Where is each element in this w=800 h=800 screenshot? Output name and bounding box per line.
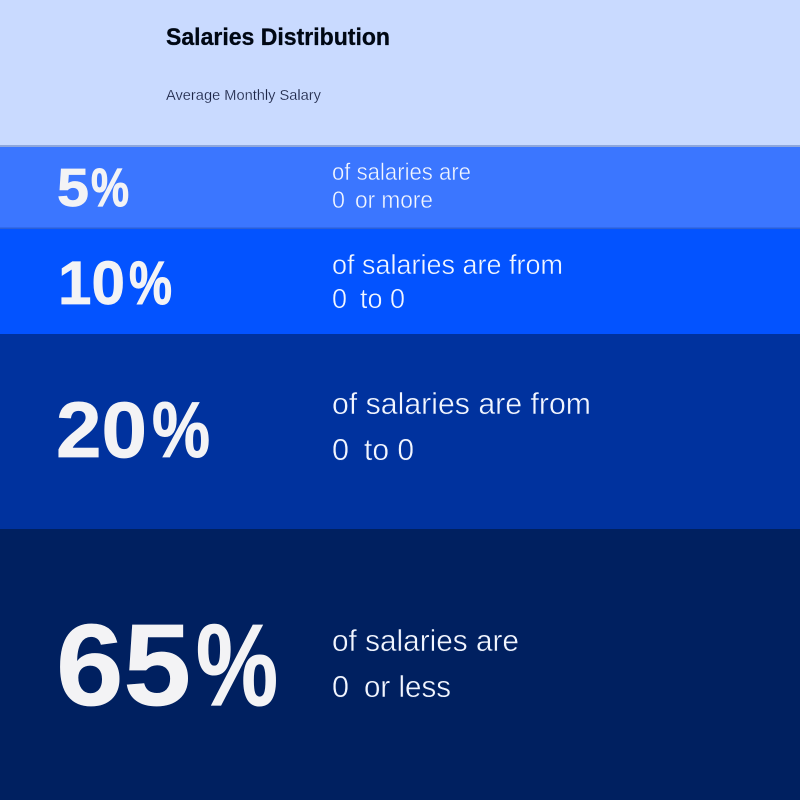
panel: 10% band <box>0 228 800 334</box>
panel: 5% band <box>0 145 800 228</box>
description: 20%: to 0 <box>364 432 414 467</box>
description: 20%: of salaries are from <box>332 386 591 421</box>
description: 20%: 0 <box>332 432 349 467</box>
description: 10%: of salaries are from <box>332 249 563 280</box>
description: 5%: of salaries are <box>332 159 471 186</box>
percentage: 65%: 65 <box>56 600 191 730</box>
panel: 20% band <box>0 334 800 529</box>
description: 5%: or more <box>355 187 433 214</box>
description: 65%: 0 <box>332 669 349 704</box>
description: 5%: 0 <box>332 187 345 214</box>
percentage: 65%: % <box>196 600 278 730</box>
description: 65%: or less <box>364 669 451 704</box>
description: 10% <box>332 249 563 314</box>
percentage: 65% <box>56 600 278 730</box>
percentage: 5%: % <box>91 158 129 218</box>
panel: header <box>0 0 800 146</box>
description: 65%: of salaries are <box>332 623 519 658</box>
percentage: 10% <box>58 249 172 317</box>
title: Salaries Distribution <box>166 24 390 51</box>
percentage: 5%: 5 <box>57 158 89 218</box>
description: 65% <box>332 623 519 704</box>
description: 10%: 0 <box>332 283 347 314</box>
subtitle: Average Monthly Salary <box>166 87 321 104</box>
percentage: 20%: 20 <box>56 385 147 474</box>
percentage: 10%: % <box>129 249 172 317</box>
percentage: 10%: 10 <box>58 249 125 317</box>
description: 20% <box>332 386 591 467</box>
panel: 65% band <box>0 529 800 800</box>
percentage: 20%: % <box>152 385 210 474</box>
percentage: 5% <box>57 158 129 218</box>
description: 5% <box>332 159 471 214</box>
description: 10%: to 0 <box>360 283 405 314</box>
percentage: 20% <box>56 385 210 474</box>
